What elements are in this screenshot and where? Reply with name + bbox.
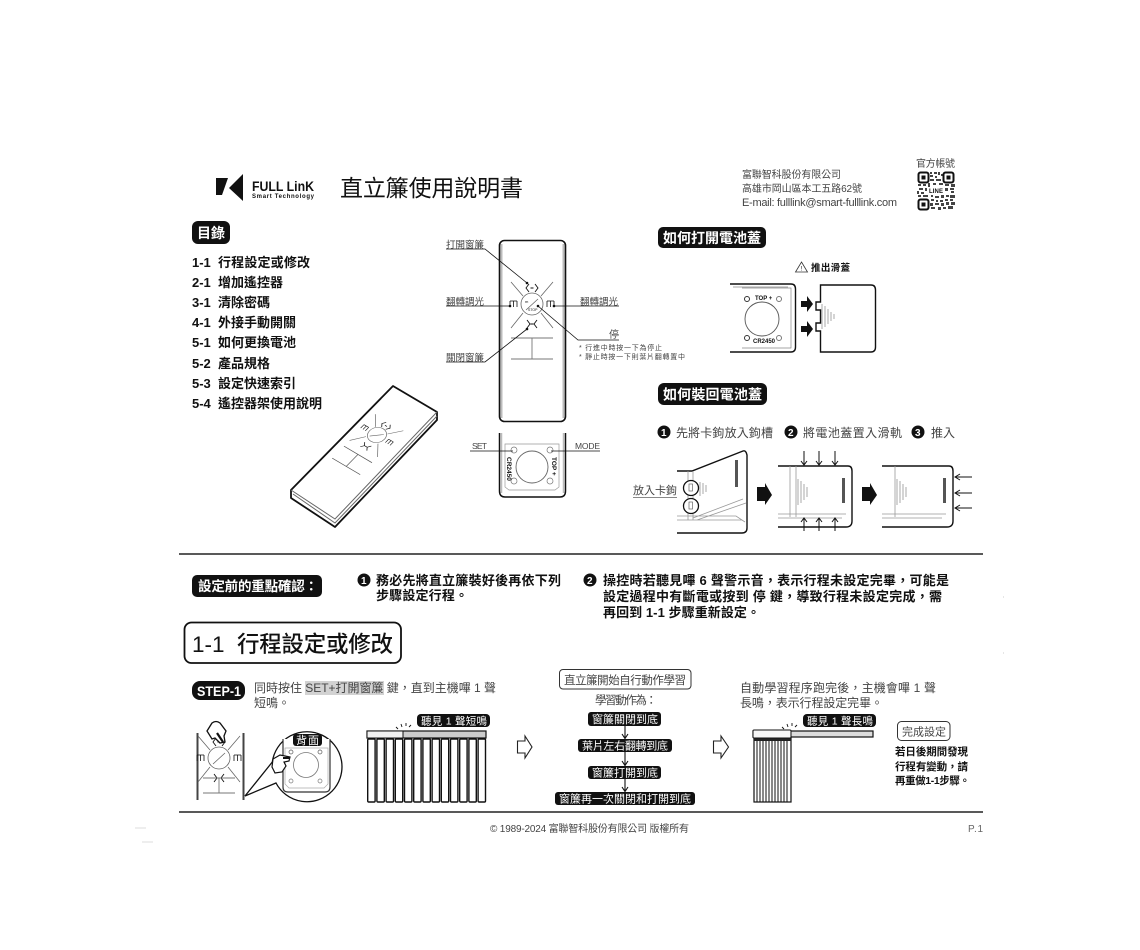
step 1 instruction — [254, 680, 496, 710]
remote back diagram: SET — [472, 441, 487, 451]
section heading 1-1: 1-1 — [192, 632, 225, 657]
company info — [742, 168, 897, 209]
learning flow: 窗簾打開到底 — [592, 766, 658, 780]
note 1: 步驟設定行程。 — [376, 588, 468, 603]
remote button callouts: 關閉窗簾 — [446, 352, 484, 364]
table of contents list: 1-1 — [192, 255, 211, 270]
reminder text — [895, 745, 970, 787]
table of contents list: 4-1 — [192, 315, 211, 330]
battery cover open diagram — [730, 284, 876, 352]
table of contents list: 增加遙控器 — [218, 275, 283, 290]
step 1 badge: STEP-1 — [197, 683, 241, 699]
warning: slide cover out: 推出滑蓋 — [811, 262, 850, 274]
curtain closed, short beep: 聽見 1 聲短鳴 — [421, 714, 488, 728]
heading: how to open battery cover: 如何打開電池蓋 — [663, 230, 761, 246]
remote button callouts: * 靜止時按一下則葉片翻轉置中 — [579, 352, 685, 361]
remote back diagram: MODE — [575, 441, 600, 451]
completion text: 長鳴，表示行程設定完畢。 — [740, 695, 883, 710]
section heading 1-1 — [184, 622, 401, 663]
note 2: 2 — [587, 576, 593, 587]
hook-in diagram: 放入卡鉤 — [633, 483, 677, 497]
auto-learning start box: 直立簾開始自行動作學習 — [564, 673, 686, 687]
official account QR code: 官方帳號 — [916, 157, 955, 170]
heading: how to reinstall battery cover — [658, 383, 767, 405]
heading: table of contents: 目錄 — [197, 225, 225, 241]
remote button callouts: 翻轉調光 — [446, 296, 484, 308]
label: key checks before setup — [192, 575, 322, 597]
company info: 高雄市岡山區本工五路62號 — [742, 182, 862, 195]
note 1: 1 — [361, 576, 367, 587]
learning flow: 葉片左右翻轉到底 — [582, 738, 668, 752]
step 1 remote with finger — [197, 722, 244, 800]
remote back diagram: CR2450 — [505, 457, 512, 481]
learning flow: 窗簾關閉到底 — [592, 712, 658, 726]
curtain closed, short beep — [367, 714, 490, 802]
note 1 — [358, 573, 561, 603]
callout: back of remote: 背面 — [296, 733, 319, 747]
front remote diagram: m — [525, 299, 529, 304]
hook-in diagram — [633, 451, 747, 533]
note 2: 操控時若聽見嗶 6 聲警示音，表示行程未設定完畢，可能是 — [603, 573, 949, 588]
company info: E-mail: fulllink@smart-fulllink.com — [742, 197, 897, 209]
battery cover open diagram: CR2450 — [753, 339, 776, 345]
company info: 富聯智科股份有限公司 — [742, 168, 841, 181]
remote back diagram: TOP + — [550, 457, 557, 476]
table of contents list: 產品規格 — [218, 356, 270, 371]
reinstall steps: 3 — [915, 428, 921, 439]
heading: table of contents — [192, 221, 230, 244]
curtain open, long beep: 聽見 1 聲長鳴 — [807, 714, 874, 728]
front remote diagram — [500, 240, 566, 422]
logo: FULL LinK — [252, 178, 314, 194]
reinstall steps: 先將卡鉤放入鉤槽 — [676, 425, 773, 440]
hollow arrow — [518, 736, 532, 758]
setup complete box — [898, 722, 950, 740]
remote button callouts: * 行進中時按一下為停止 — [579, 343, 662, 352]
curtain open, long beep — [753, 714, 876, 802]
table of contents list: 5-1 — [192, 335, 211, 350]
table of contents list — [192, 255, 322, 411]
remote button callouts — [446, 239, 685, 364]
label: key checks before setup: 設定前的重點確認： — [198, 578, 318, 594]
setup complete box: 完成設定 — [902, 724, 946, 738]
remote button callouts: 停 — [609, 328, 619, 341]
table of contents list: 設定快速索引 — [218, 376, 296, 391]
step 1 instruction: 同時按住 SET+打開窗簾 鍵，直到主機嗶 1 聲 — [254, 680, 496, 695]
table of contents list: 外接手動開關 — [218, 315, 296, 330]
logo — [216, 174, 315, 201]
reminder text: 行程有變動，請 — [895, 760, 968, 773]
logo: Smart Technology — [252, 194, 315, 200]
heading: how to open battery cover — [658, 227, 766, 248]
learning flow — [555, 712, 695, 806]
title: 直立簾使用說明書 — [340, 175, 523, 201]
table of contents list: 清除密碼 — [218, 295, 270, 310]
note 2: 再回到 1-1 步驟重新設定。 — [603, 605, 760, 620]
table of contents list: 5-4 — [192, 396, 212, 411]
note 2: 設定過程中有斷電或按到 停 鍵，導致行程未設定完成，需 — [603, 589, 942, 604]
battery cover open diagram: TOP + — [755, 296, 773, 302]
reinstall steps: 將電池蓋置入滑軌 — [803, 425, 902, 440]
learning actions label: 學習動作為： — [595, 693, 657, 707]
note 1: 務必先將直立簾裝好後再依下列 — [376, 573, 561, 588]
pushed-in diagram — [882, 466, 972, 527]
note 2 — [584, 573, 949, 620]
reinstall steps: 1 — [661, 428, 667, 439]
table of contents list: 行程設定或修改 — [218, 255, 310, 270]
remote button callouts: 打開窗簾 — [446, 239, 484, 251]
official account QR code: LINE — [929, 189, 943, 195]
completion text: 自動學習程序跑完後，主機會嗶 1 聲 — [740, 680, 936, 695]
learning flow: 窗簾再一次關閉和打開到底 — [559, 792, 691, 806]
angled remote illustration — [291, 386, 437, 527]
arrow — [757, 483, 772, 505]
table of contents list: 3-1 — [192, 295, 211, 310]
table of contents list: 遙控器架使用說明 — [218, 396, 322, 411]
callout: back of remote — [245, 732, 342, 802]
remote button callouts: 翻轉調光 — [580, 296, 618, 308]
table of contents list: 如何更換電池 — [218, 335, 296, 350]
step 1 instruction: 短鳴。 — [254, 696, 290, 710]
warning: slide cover out: ! — [800, 266, 802, 272]
warning: slide cover out — [796, 262, 850, 274]
reinstall steps: 2 — [788, 428, 794, 439]
copyright: © 1989-2024 富聯智科股份有限公司 版權所有 — [490, 822, 689, 835]
heading: how to reinstall battery cover: 如何裝回電池蓋 — [663, 386, 762, 402]
hollow arrow — [714, 736, 728, 758]
auto-learning start box — [560, 670, 691, 689]
section heading 1-1: 行程設定或修改 — [237, 632, 393, 657]
page number: P.1 — [968, 824, 983, 835]
arrow — [862, 483, 877, 505]
remote back diagram — [470, 433, 600, 497]
official account QR code — [916, 157, 955, 210]
table of contents list: 5-3 — [192, 376, 211, 391]
reminder text: 若日後期間發現 — [895, 745, 968, 758]
front remote diagram: STOP — [528, 308, 538, 312]
table of contents list: 2-1 — [192, 275, 211, 290]
completion text — [740, 680, 936, 710]
reinstall steps — [658, 425, 955, 440]
reminder text: 再重做1-1步驟。 — [895, 774, 970, 787]
table of contents list: 5-2 — [192, 356, 211, 371]
reinstall steps: 推入 — [931, 426, 955, 440]
slide-in diagram — [778, 451, 852, 531]
